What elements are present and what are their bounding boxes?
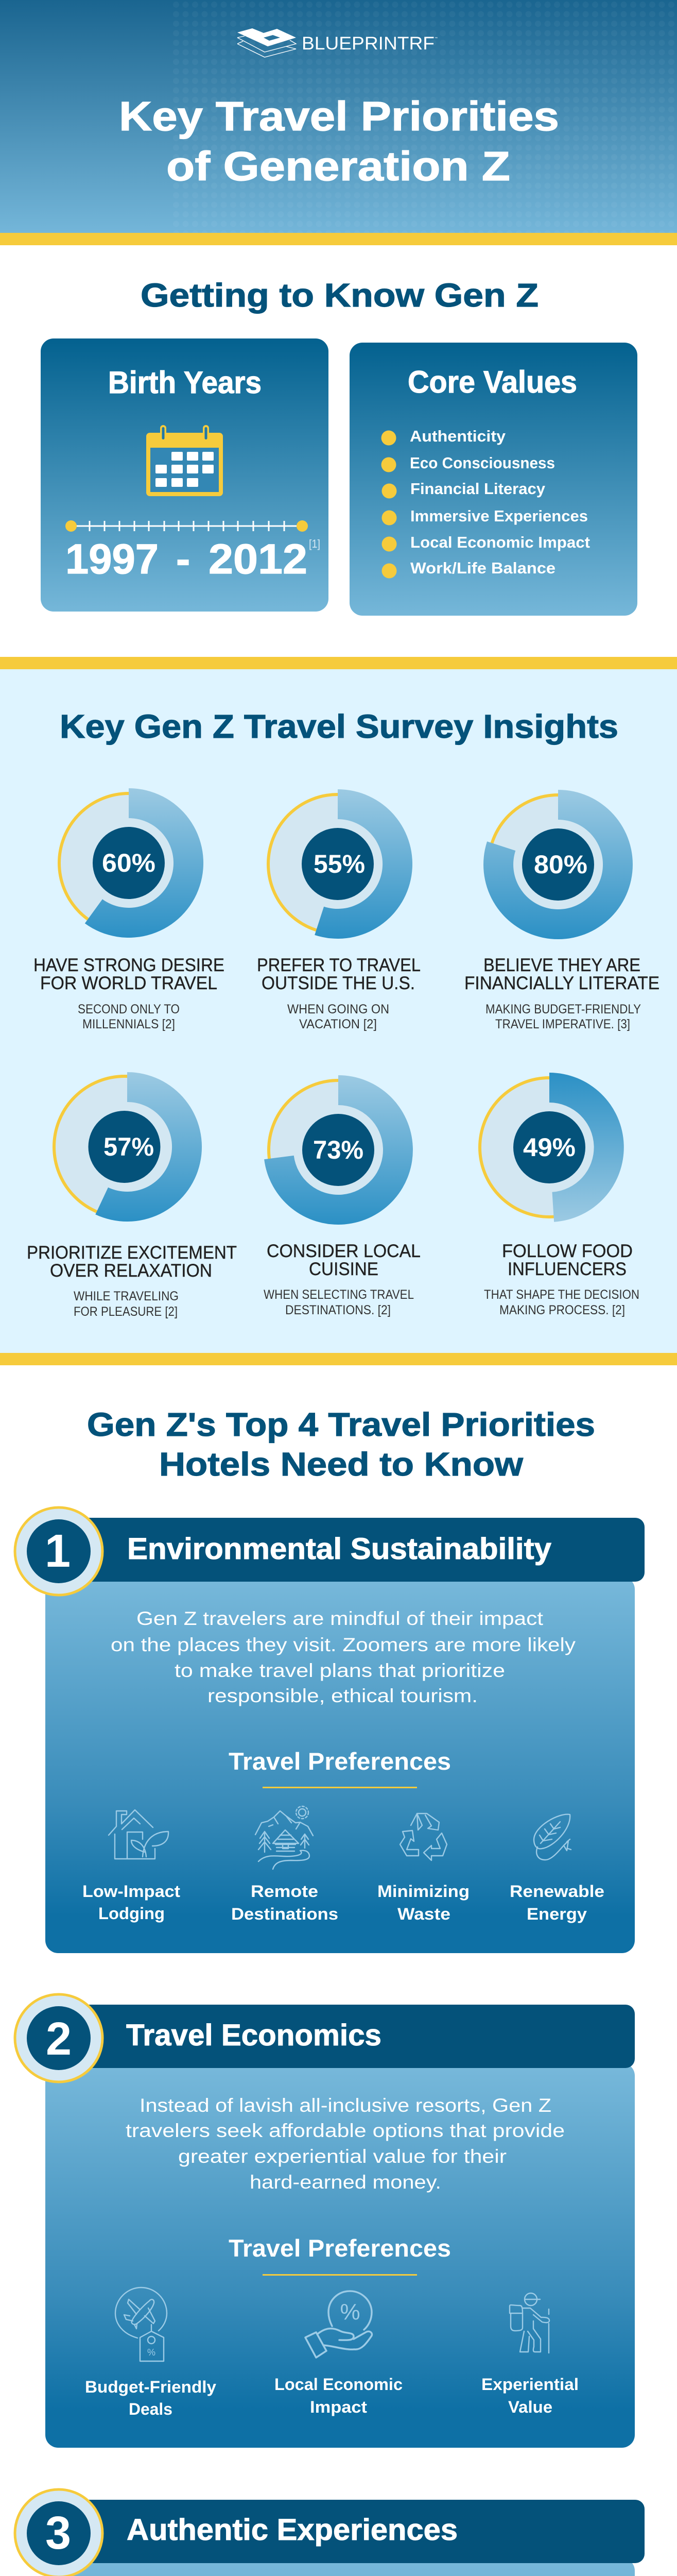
preference: budget-friendly deals: Deals <box>129 2400 172 2418</box>
core values list: Financial Literacy <box>410 480 546 498</box>
donut 60%: 60% <box>102 849 155 877</box>
donut 49%: 49% <box>523 1133 576 1162</box>
body text: hard-earned money. <box>250 2172 441 2193</box>
preference: low-impact lodging: Lodging <box>98 1904 165 1923</box>
preference: minimizing waste: Minimizing <box>377 1882 470 1901</box>
donut 55%: PREFER TO TRAVEL <box>257 955 421 975</box>
donut 80%: TRAVEL IMPERATIVE. [3] <box>495 1017 630 1031</box>
preference: renewable energy: Renewable <box>510 1882 604 1901</box>
title: Authentic Experiences <box>127 2513 458 2547</box>
panel: core values <box>350 343 637 616</box>
title <box>119 93 559 189</box>
donut 57%: WHILE TRAVELING <box>74 1289 179 1303</box>
preference: renewable energy <box>510 1815 604 1923</box>
donut 80%: 80% <box>534 850 587 879</box>
number badge 2: 2 <box>46 2013 72 2065</box>
logo: ™ <box>435 37 438 40</box>
core values list: Eco Consciousness <box>410 454 555 472</box>
donut 73%: WHEN SELECTING TRAVEL <box>264 1287 414 1302</box>
travel preferences heading <box>229 2234 451 2276</box>
donut 49%: THAT SHAPE THE DECISION <box>484 1287 639 1302</box>
logo: BLUEPRINTRF <box>302 33 435 54</box>
header banner <box>0 0 677 233</box>
number badge 1 <box>15 1507 102 1595</box>
body text: greater experiential value for their <box>178 2146 507 2167</box>
heading: getting to know gen z: Getting to Know Gen Z <box>141 277 539 314</box>
number badge 2 <box>15 1994 102 2082</box>
preference: experiential value: Value <box>508 2398 552 2416</box>
number badge 1: 1 <box>45 1526 71 1577</box>
title: Key Travel Priorities <box>119 93 559 139</box>
number badge 3: 3 <box>45 2507 71 2559</box>
donut 49%: INFLUENCERS <box>508 1259 627 1279</box>
heading: top 4 priorities: Hotels Need to Know <box>159 1446 523 1483</box>
heading: top 4 priorities: Gen Z's Top 4 Travel Priorities <box>87 1406 595 1443</box>
preference: local economic impact: Local Economic <box>274 2375 403 2394</box>
preference: minimizing waste: Waste <box>397 1905 450 1923</box>
preference: low-impact lodging: Low-Impact <box>82 1882 180 1901</box>
body text: travelers seek affordable options that provide <box>126 2120 565 2141</box>
donut 73%: CONSIDER LOCAL <box>267 1241 421 1261</box>
preference: low-impact lodging <box>82 1810 180 1923</box>
core values list: Work/Life Balance <box>410 559 556 577</box>
body text <box>126 2095 565 2193</box>
donut 73%: 73% <box>313 1136 363 1164</box>
donut 60%: MILLENNIALS [2] <box>82 1017 175 1031</box>
donut 73% <box>264 1075 421 1317</box>
body text <box>111 1608 576 1706</box>
birth year range: [1] <box>309 537 320 550</box>
donut 57%: OVER RELAXATION <box>50 1261 212 1281</box>
birth years heading: Birth Years <box>108 365 262 400</box>
donut 57% <box>27 1072 237 1319</box>
core values list <box>381 427 590 578</box>
panel: priority 2 travel economics <box>15 1994 635 2448</box>
title: Environmental Sustainability <box>127 1532 551 1566</box>
donut 80%: FINANCIALLY LITERATE <box>464 973 659 993</box>
title: Travel Economics <box>126 2019 381 2052</box>
number badge 3 <box>15 2489 102 2576</box>
preference: remote destinations <box>231 1806 338 1923</box>
preference: renewable energy: Energy <box>527 1905 587 1923</box>
donut 55%: OUTSIDE THE U.S. <box>262 973 415 993</box>
travel preferences heading: Travel Preferences <box>229 2234 451 2262</box>
donut 55% <box>257 789 421 1031</box>
yellow divider <box>0 233 677 245</box>
birth year range: 1997 <box>65 536 159 583</box>
core values list: Immersive Experiences <box>410 507 588 525</box>
panel: birth years <box>41 338 328 612</box>
birth year range <box>65 536 320 583</box>
travel preferences heading: Travel Preferences <box>229 1748 451 1775</box>
preference: remote destinations: Destinations <box>231 1905 338 1923</box>
preference: experiential value: Experiential <box>481 2375 579 2394</box>
preference: local economic impact <box>274 2291 403 2416</box>
donut 55%: WHEN GOING ON <box>287 1002 389 1016</box>
timeline <box>65 520 308 532</box>
donut 55%: 55% <box>314 850 365 878</box>
donut 80% <box>464 790 659 1031</box>
logo <box>237 28 438 57</box>
preference: local economic impact: Impact <box>310 2398 367 2416</box>
donut 60%: FOR WORLD TRAVEL <box>40 973 217 993</box>
heading: top 4 priorities <box>87 1406 595 1483</box>
core values list: Authenticity <box>410 427 506 445</box>
travel preferences heading <box>229 1748 451 1788</box>
donut 80%: MAKING BUDGET-FRIENDLY <box>485 1002 641 1016</box>
panel: survey insights <box>0 657 677 1365</box>
preference: local economic impact: % <box>340 2299 360 2325</box>
donut 57%: FOR PLEASURE [2] <box>74 1304 178 1319</box>
donut 60%: SECOND ONLY TO <box>78 1002 180 1016</box>
donut 49% <box>480 1073 639 1317</box>
donut 80%: BELIEVE THEY ARE <box>483 955 640 975</box>
donut 57%: 57% <box>103 1132 154 1161</box>
donut 73%: CUISINE <box>309 1259 378 1279</box>
body text: responsible, ethical tourism. <box>207 1685 478 1706</box>
title: of Generation Z <box>166 143 510 189</box>
preference: budget-friendly deals <box>85 2287 216 2418</box>
donut 55%: VACATION [2] <box>299 1017 377 1031</box>
birth year range: - <box>176 536 190 583</box>
birth year range: 2012 <box>209 536 307 583</box>
core values list: Local Economic Impact <box>410 533 590 551</box>
donut 57%: PRIORITIZE EXCITEMENT <box>27 1243 237 1263</box>
body text: to make travel plans that prioritize <box>175 1660 505 1681</box>
panel: priority 1 environmental sustainability <box>15 1507 645 1953</box>
core values heading: Core Values <box>408 365 577 399</box>
body text: Gen Z travelers are mindful of their impact <box>136 1608 544 1629</box>
donut 49%: MAKING PROCESS. [2] <box>499 1303 625 1317</box>
panel: priority 3 authentic experiences <box>15 2489 645 2576</box>
icon: calendar <box>146 425 223 496</box>
preference: budget-friendly deals: Budget-Friendly <box>85 2378 216 2396</box>
preference: budget-friendly deals: % <box>147 2347 155 2358</box>
donut 60%: HAVE STRONG DESIRE <box>33 955 224 975</box>
body text: on the places they visit. Zoomers are more likely <box>111 1634 576 1655</box>
preference: remote destinations: Remote <box>251 1882 318 1901</box>
survey heading: Key Gen Z Travel Survey Insights <box>60 708 618 745</box>
preference: minimizing waste <box>377 1814 470 1923</box>
donut 73%: DESTINATIONS. [2] <box>285 1303 391 1317</box>
donut 49%: FOLLOW FOOD <box>502 1241 633 1261</box>
body text: Instead of lavish all-inclusive resorts, Gen Z <box>140 2095 551 2116</box>
donut 60% <box>33 788 224 1031</box>
preference: experiential value <box>481 2293 579 2416</box>
